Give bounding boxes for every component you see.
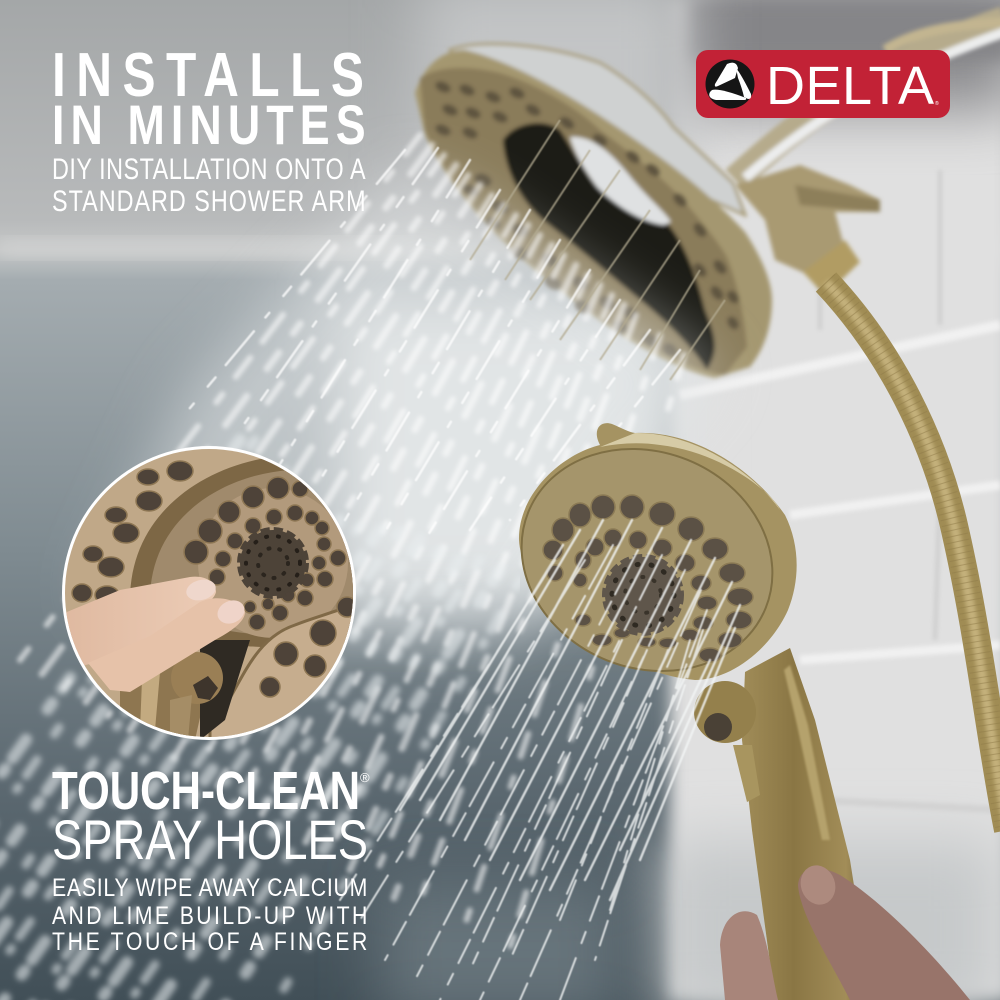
text: easily wipe away: THE TOUCH OF A FINGER <box>52 927 367 955</box>
handle button <box>694 681 756 743</box>
spray lines across dark opening <box>470 120 725 380</box>
wordmark: DELTA <box>766 56 934 116</box>
text: DIY installation: DIY INSTALLATION ONTO A <box>52 152 366 186</box>
heading: touch-clean spray holes <box>52 761 370 871</box>
thumb <box>798 868 970 1000</box>
text: DIY installation <box>52 152 366 218</box>
circular detail inset <box>60 445 360 745</box>
water streams from hand-held head <box>340 520 740 1000</box>
flexible hose <box>826 282 1000 830</box>
water bokeh droplets lower left <box>0 440 520 1000</box>
inset head ring <box>130 455 360 648</box>
inset lower plate <box>208 602 353 737</box>
registered mark: ® <box>935 100 939 107</box>
head face <box>488 412 806 708</box>
text: DIY installation: STANDARD SHOWER ARM <box>52 184 366 218</box>
wall tile grout lines <box>680 170 1000 810</box>
head rim <box>519 423 797 680</box>
inset centre rosette <box>240 530 306 596</box>
inset head plate <box>60 445 360 745</box>
head rim <box>415 50 772 378</box>
upper shower head <box>415 44 772 378</box>
inset spray holes <box>72 461 357 697</box>
spray holes <box>543 495 753 662</box>
inset stem and knob <box>120 664 200 736</box>
heading: installs in minutes: IN MINUTES <box>52 93 366 156</box>
fingernails <box>186 580 216 600</box>
inset fingers <box>62 577 216 670</box>
water mist under upper head <box>90 170 720 640</box>
heading: touch-clean spray holes: ® <box>360 770 370 785</box>
light gap seen through head <box>570 137 671 225</box>
chrome back of head <box>450 44 745 215</box>
hand-held shower head <box>488 412 806 708</box>
text: easily wipe away <box>52 873 367 955</box>
centre spray rosette <box>605 557 681 633</box>
hand holding shower <box>720 860 970 1000</box>
hand-held shower handle <box>694 648 872 1000</box>
logo mark <box>706 60 754 108</box>
heading: installs in minutes <box>52 40 366 156</box>
heading: installs in minutes: INSTALLS <box>52 40 364 109</box>
upper shower arm <box>735 20 1000 296</box>
face holes <box>434 79 741 360</box>
heading: touch-clean spray holes: SPRAY HOLES <box>52 808 368 871</box>
text: easily wipe away: AND LIME BUILD-UP WITH <box>52 901 367 929</box>
brand logo badge <box>696 50 950 118</box>
water streams from upper head <box>20 135 684 968</box>
fingers behind handle <box>720 911 778 1000</box>
text: easily wipe away: EASILY WIPE AWAY CALCIUM <box>52 873 367 901</box>
dark centre opening <box>503 123 715 370</box>
heading: touch-clean spray holes: TOUCH-CLEAN <box>52 761 360 821</box>
head face <box>420 68 747 375</box>
